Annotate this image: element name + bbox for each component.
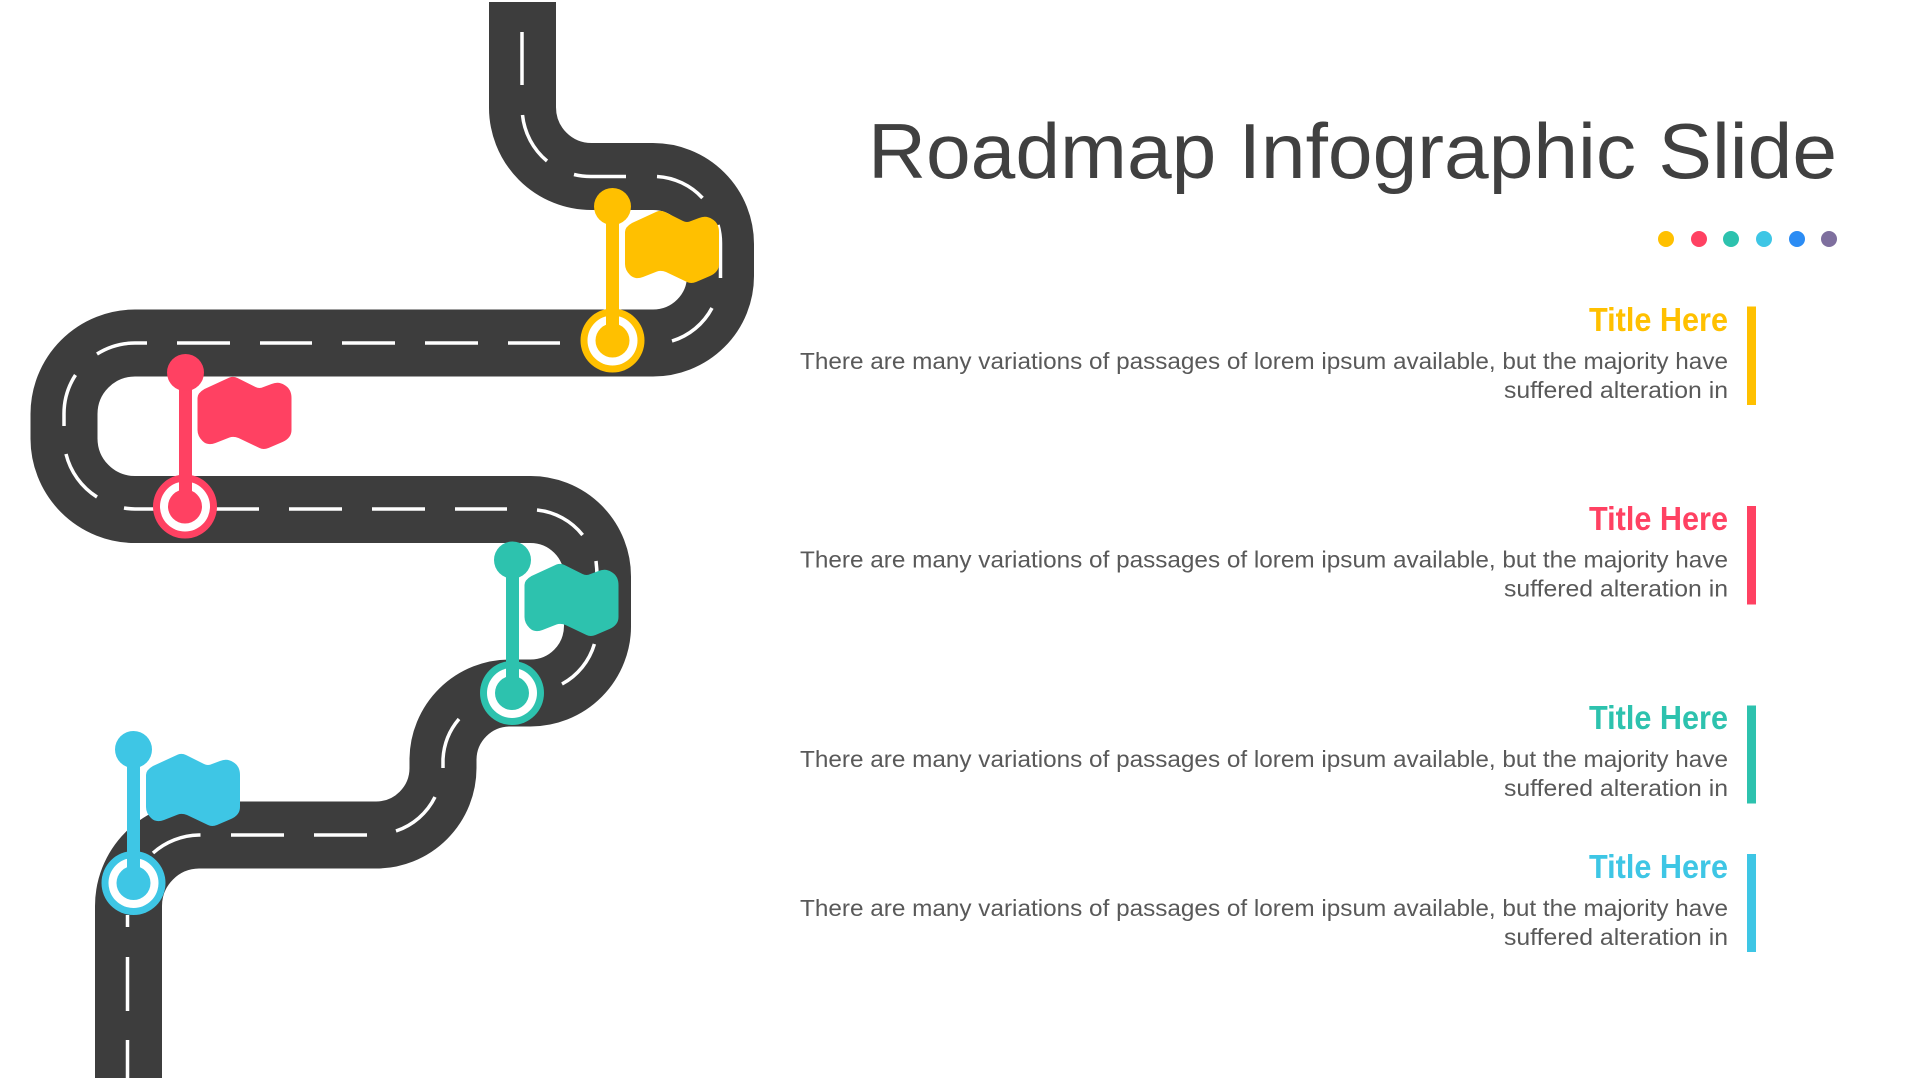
item 1 body: There are many variations of passages of lorem ipsum available, but the majority have [800,348,1728,374]
item 2 body: suffered alteration in [1504,576,1728,602]
marker: red flag [153,354,292,538]
item 3 body: suffered alteration in [1504,775,1728,801]
item 4 body: suffered alteration in [1504,924,1728,950]
item 1 bar [1747,306,1756,405]
item 3 body: There are many variations of passages of lorem ipsum available, but the majority have [800,746,1728,772]
marker: blue flag [102,731,240,915]
item 2 bar [1747,506,1756,604]
road centre dashes [64,32,721,1078]
item 3 body [800,746,1728,801]
item 1 body [800,348,1728,403]
colour dots [1658,231,1837,247]
item 4 body: There are many variations of passages of lorem ipsum available, but the majority have [800,895,1728,921]
panel: item 2 [800,500,1756,604]
panel: item 1 [800,301,1756,405]
panel: item 4 [800,848,1756,952]
item 4 bar [1747,854,1756,952]
title: Roadmap Infographic Slide [868,107,1837,195]
item 4 heading: Title Here [1589,848,1728,885]
marker: teal flag [480,542,618,725]
item 2 body [800,546,1728,602]
item 2 heading: Title Here [1589,500,1728,537]
marker: yellow flag [580,188,719,372]
item 3 bar [1747,706,1756,804]
item 4 body [800,895,1728,950]
item 3 heading: Title Here [1589,699,1728,736]
item 1 heading: Title Here [1589,301,1728,338]
panel: item 3 [800,699,1756,804]
item 2 body: There are many variations of passages of lorem ipsum available, but the majority have [800,546,1728,572]
road [64,2,721,1078]
item 1 body: suffered alteration in [1504,377,1728,403]
